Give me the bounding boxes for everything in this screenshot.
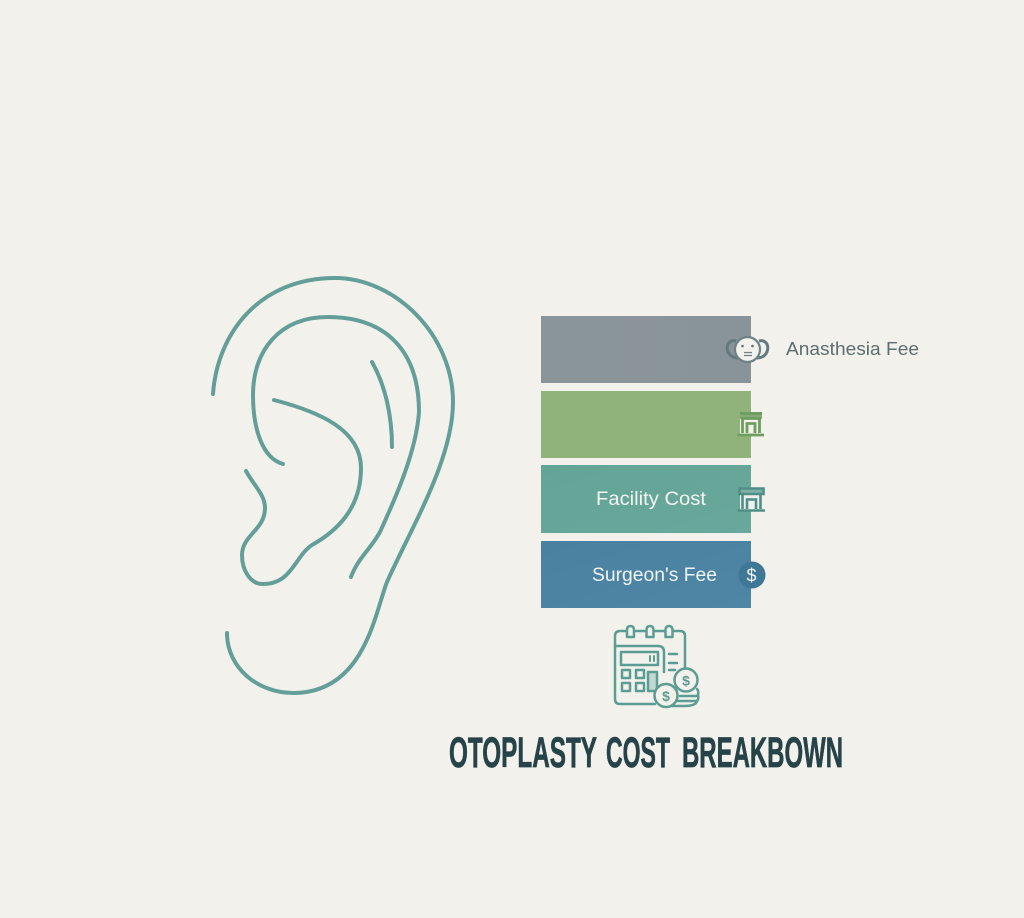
label: facility cost: Facility Cost bbox=[596, 488, 707, 510]
coin dollar signs bbox=[662, 672, 690, 704]
icon: facility building bbox=[738, 488, 765, 510]
calendar body bbox=[615, 631, 685, 704]
bar: facility cost bbox=[541, 465, 751, 533]
ear inner fold bbox=[253, 317, 419, 577]
bar: anesthesia bbox=[541, 316, 751, 383]
bar: surgeon's fee bbox=[541, 541, 751, 608]
label: anasthesia fee: Anasthesia Fee bbox=[786, 338, 919, 359]
icon: anesthesia mask bbox=[727, 337, 768, 362]
label: surgeon's fee: Surgeon's Fee bbox=[592, 564, 717, 586]
coin dollar signs: $ bbox=[682, 672, 690, 688]
icon: dollar badge bbox=[738, 562, 766, 588]
icon: calendar calculator and coins bbox=[615, 626, 698, 707]
calendar rings bbox=[627, 626, 672, 637]
title: COST bbox=[606, 729, 670, 777]
stacked cost bars bbox=[541, 316, 751, 608]
ear outer helix and lobe bbox=[213, 278, 453, 693]
ear line illustration bbox=[213, 278, 453, 693]
title: OTOPLASTY bbox=[449, 729, 597, 777]
coin dollar signs: $ bbox=[662, 688, 670, 704]
ear short upper fold bbox=[372, 362, 392, 447]
ear concha and tragus bbox=[242, 400, 361, 584]
icon: dollar badge: $ bbox=[746, 566, 757, 586]
coins bbox=[672, 689, 698, 706]
title bbox=[449, 729, 843, 777]
icon: green building bbox=[738, 412, 764, 435]
bar: green unlabeled bbox=[541, 391, 751, 458]
calculator bbox=[615, 646, 664, 672]
calendar lines bbox=[669, 654, 677, 670]
title: BREAKBOWN bbox=[682, 729, 843, 777]
